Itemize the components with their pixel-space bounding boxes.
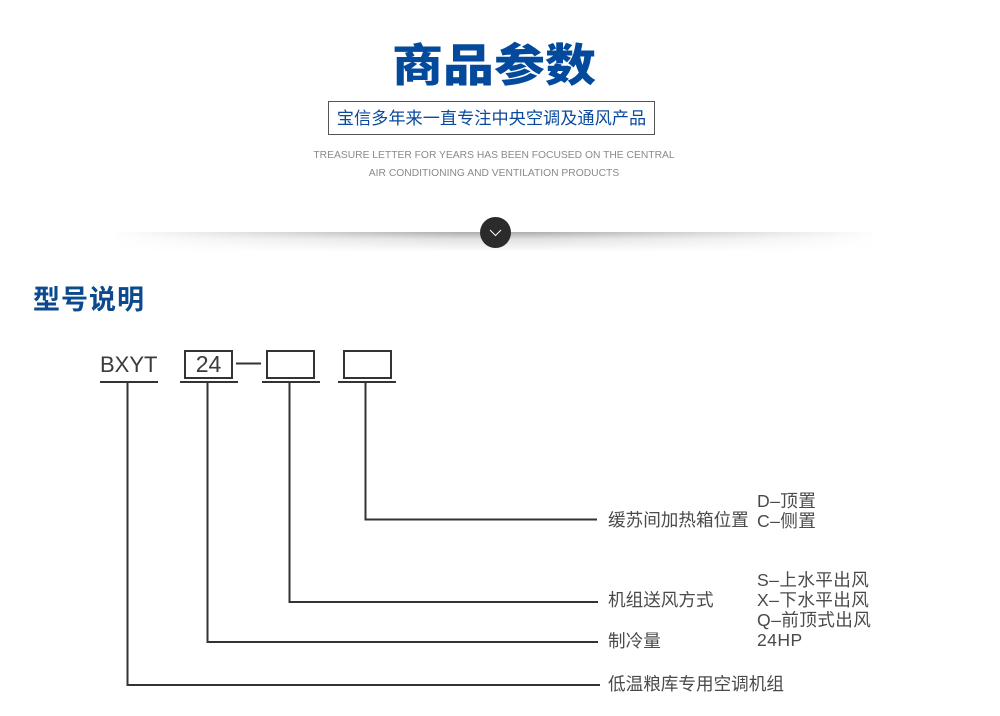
heater position code box [344, 351, 391, 378]
options: heater position: C–侧置 [757, 511, 816, 531]
subtitle box [328, 101, 655, 135]
options: air supply and capacity: X–下水平出风 [757, 590, 869, 610]
air supply code box [267, 351, 314, 378]
capacity code box: 24 [196, 351, 221, 377]
label: heater position: 缓苏间加热箱位置 [608, 510, 749, 530]
label: air supply mode: 机组送风方式 [608, 590, 714, 610]
leader line: heater position [338, 382, 597, 520]
options: heater position: D–顶置 [757, 491, 816, 511]
model prefix BXYT: BXYT [100, 352, 157, 377]
title: 商品参数 [392, 40, 596, 91]
icon: round chevron button [480, 217, 511, 248]
options: air supply and capacity: Q–前顶式出风 [757, 610, 871, 630]
english tagline [313, 150, 675, 178]
label: capacity: 制冷量 [608, 631, 661, 651]
english tagline: TREASURE LETTER FOR YEARS HAS BEEN FOCUSED ON THE CENTRAL [313, 150, 675, 161]
leader line: unit type [100, 382, 600, 685]
options: air supply and capacity: S–上水平出风 [757, 570, 869, 590]
leader line: capacity [180, 382, 598, 642]
subtitle box: 宝信多年来一直专注中央空调及通风产品 [337, 108, 646, 128]
label: unit type: 低温粮库专用空调机组 [608, 674, 784, 694]
section heading: 型号说明 [33, 285, 145, 315]
options: heater position [757, 491, 816, 531]
capacity code box [185, 351, 232, 378]
options: air supply and capacity: 24HP [757, 630, 803, 650]
leader line: air supply [262, 382, 598, 602]
options: air supply and capacity [757, 570, 871, 650]
english tagline: AIR CONDITIONING AND VENTILATION PRODUCTS [369, 168, 619, 178]
dash [236, 362, 261, 364]
divider shadow [149, 232, 841, 248]
